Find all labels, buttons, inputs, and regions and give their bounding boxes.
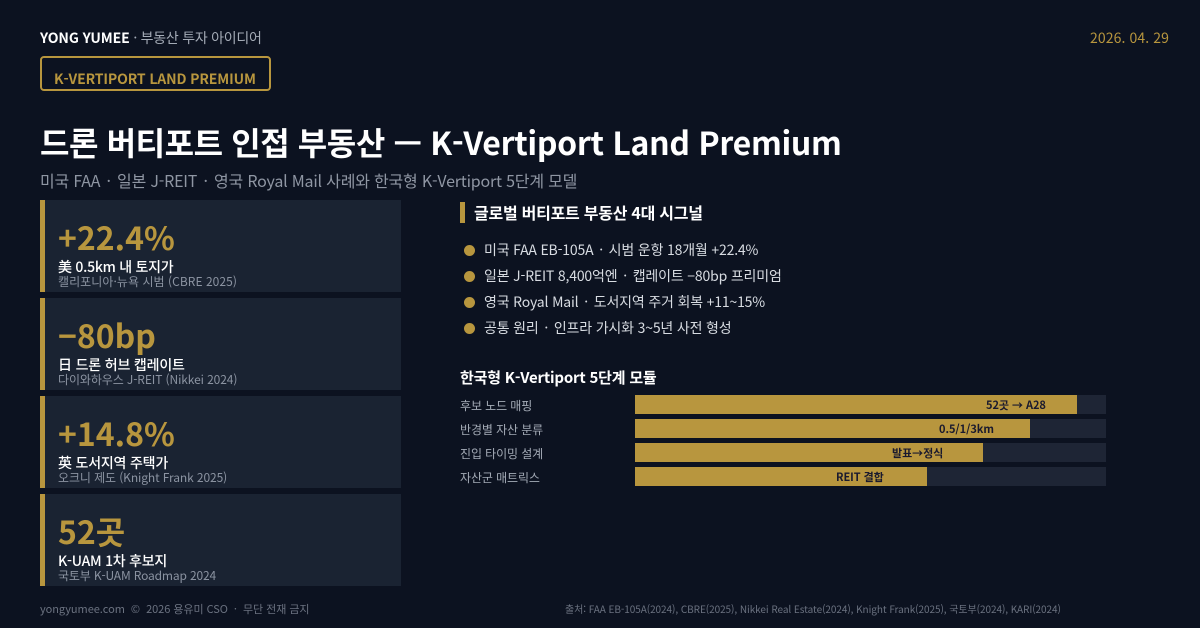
stat card: land price: 캘리포니아·뉴욕 시범 (CBRE 2025) bbox=[58, 273, 237, 290]
bullet 2 bbox=[464, 266, 782, 286]
stat card: land price: +22.4% bbox=[58, 214, 175, 260]
bullet 4 bbox=[464, 318, 731, 338]
row 3 bar: 발표→정식 bbox=[892, 445, 943, 461]
subtitle: 미국 FAA · 일본 J-REIT · 영국 Royal Mail 사례와 한국형 K-Vertiport 5단계 모델 bbox=[40, 168, 577, 192]
row 1 bar bbox=[635, 395, 1106, 414]
stat card: land price bbox=[40, 200, 401, 292]
tag badge bbox=[40, 56, 271, 91]
row 4 label: 자산군 매트릭스 bbox=[460, 469, 540, 486]
stat card: candidate sites: 국토부 K-UAM Roadmap 2024 bbox=[58, 567, 216, 584]
brand line: YONG YUMEE · 부동산 투자 아이디어 bbox=[40, 28, 262, 48]
signal list: 일본 J-REIT 8,400억엔 · 캡레이트 −80bp 프리미엄 bbox=[484, 266, 782, 286]
stat card: cap rate: −80bp bbox=[58, 312, 156, 358]
stat card: housing price: 英 도서지역 주택가 bbox=[58, 453, 168, 473]
module bar chart bbox=[460, 395, 1106, 486]
module heading: 한국형 K-Vertiport 5단계 모듈 bbox=[460, 367, 657, 388]
row 2 bar bbox=[635, 419, 1106, 438]
row 3 label: 진입 타이밍 설계 bbox=[460, 445, 543, 462]
stat card: housing price: +14.8% bbox=[58, 410, 175, 456]
footer left: yongyumee.com © 2026 용유미 CSO · 무단 전재 금지 bbox=[40, 601, 309, 617]
title: 드론 버티포트 인접 부동산 — K-Vertiport Land Premium bbox=[40, 119, 842, 165]
tag badge: K-VERTIPORT LAND PREMIUM bbox=[54, 69, 256, 89]
signal list bbox=[464, 240, 782, 338]
signal list: 미국 FAA EB-105A · 시범 운항 18개월 +22.4% bbox=[484, 240, 758, 260]
signal list: 영국 Royal Mail · 도서지역 주거 회복 +11~15% bbox=[484, 292, 765, 312]
bullet 1 bbox=[464, 240, 758, 260]
signal list: 공통 원리 · 인프라 가시화 3~5년 사전 형성 bbox=[484, 318, 731, 338]
stat card: cap rate: 日 드론 허브 캡레이트 bbox=[58, 355, 185, 375]
row 2 bar: 0.5/1/3km bbox=[939, 421, 994, 437]
footer sources: 출처: FAA EB-105A(2024), CBRE(2025), Nikkei Real Estate(2024), Knight Frank(2025), 국토부(2024), KARI(2024) bbox=[565, 601, 1061, 616]
stat card: candidate sites bbox=[40, 494, 401, 586]
stat card: land price: 美 0.5km 내 토지가 bbox=[58, 257, 173, 277]
row 4 bar bbox=[635, 467, 1106, 486]
date: 2026. 04. 29 bbox=[1090, 28, 1169, 48]
row 3 bar bbox=[635, 443, 1106, 462]
row 2 label: 반경별 자산 분류 bbox=[460, 421, 543, 438]
stat card: housing price bbox=[40, 396, 401, 488]
stat card: candidate sites: 52곳 bbox=[58, 508, 125, 554]
stat card: cap rate bbox=[40, 298, 401, 390]
stat card: housing price: 오크니 제도 (Knight Frank 2025) bbox=[58, 469, 227, 486]
signals heading: 글로벌 버티포트 부동산 4대 시그널 bbox=[474, 200, 703, 224]
stat card: candidate sites: K-UAM 1차 후보지 bbox=[58, 551, 167, 571]
stat card: cap rate: 다이와하우스 J-REIT (Nikkei 2024) bbox=[58, 371, 237, 388]
row 4 bar: REIT 결합 bbox=[836, 469, 884, 485]
bullet 3 bbox=[464, 292, 765, 312]
row 1 bar: 52곳 → A28 bbox=[986, 397, 1046, 413]
row 1 label: 후보 노드 매핑 bbox=[460, 397, 532, 414]
